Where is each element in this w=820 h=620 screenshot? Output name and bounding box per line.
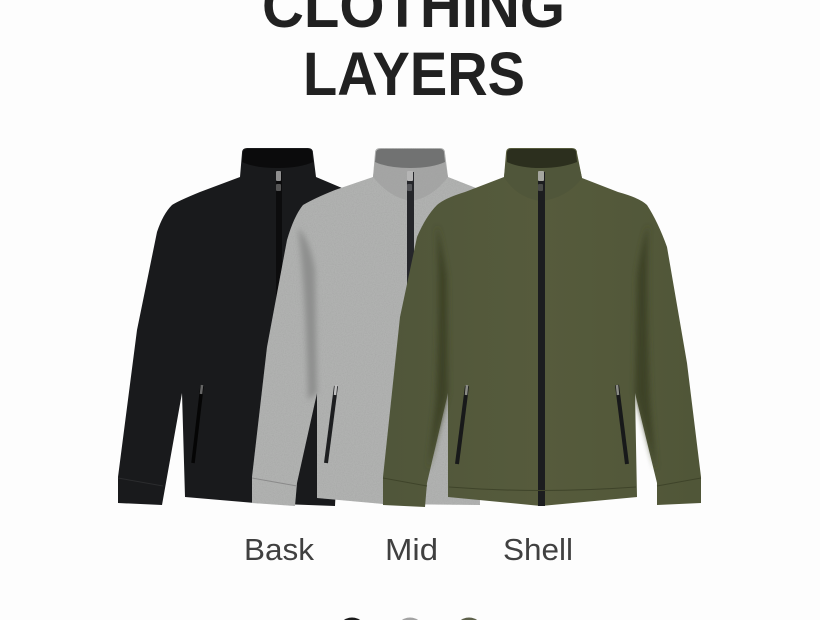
cuff seam [118, 478, 163, 486]
label: base: Bask [244, 532, 315, 567]
title [262, 0, 565, 108]
title: LAYERS [303, 40, 525, 108]
colour swatches [338, 618, 484, 620]
seams [383, 478, 701, 490]
left pocket zipper [457, 386, 467, 464]
jacket: olive shell layer [383, 148, 701, 507]
cuff seam [252, 478, 297, 486]
sleeve shading right [635, 225, 656, 470]
collar opening [375, 149, 445, 168]
zipper [276, 172, 282, 302]
jacket: black base layer [118, 148, 345, 506]
jacket: grey mid layer [252, 148, 480, 506]
collar band [504, 160, 582, 201]
right pocket zipper [617, 385, 627, 464]
collar opening [242, 149, 313, 168]
sleeve shading left [428, 225, 448, 470]
pocket zipper [326, 386, 336, 463]
collar opening [507, 149, 577, 168]
sleeve shading [298, 228, 317, 400]
label: shell: Shell [503, 532, 573, 567]
main zipper [538, 172, 545, 506]
layer labels [244, 532, 573, 567]
label: mid: Mid [385, 532, 438, 567]
collar band [373, 162, 448, 201]
zipper [407, 172, 414, 302]
pocket zipper [193, 386, 202, 463]
